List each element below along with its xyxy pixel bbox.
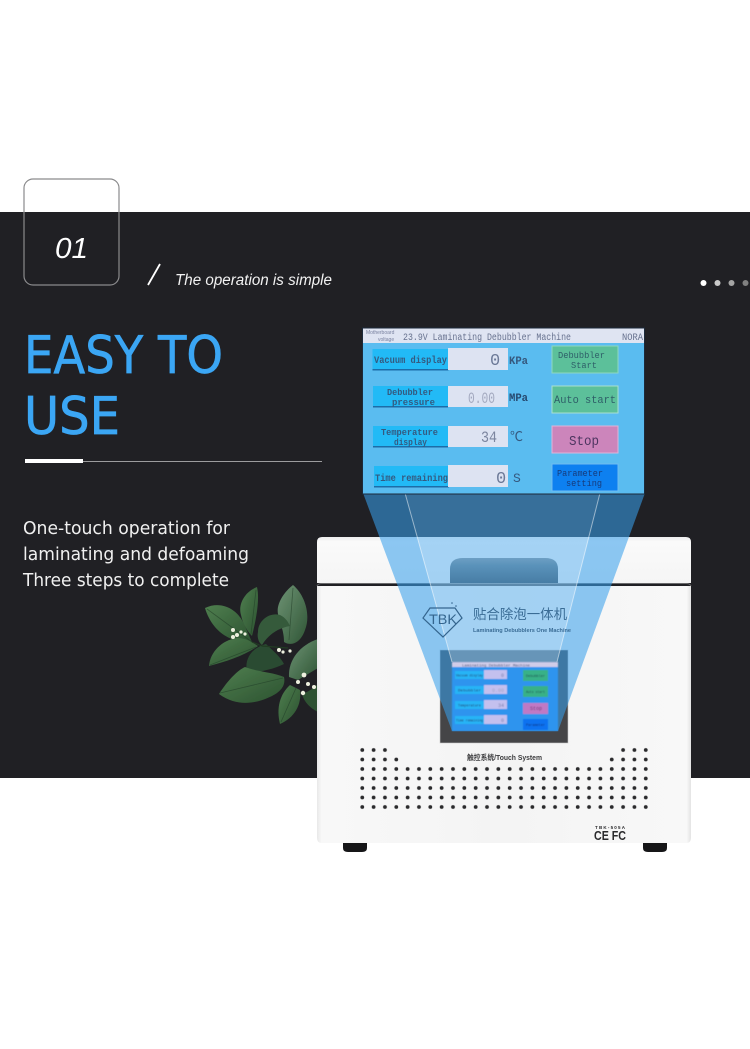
row: debubbler pressure: Debubbler [387,388,433,398]
row: vacuum display [372,348,528,371]
brand name: 贴合除泡一体机 [473,607,568,622]
small touch screen: 34 [498,703,504,709]
small touch screen: Debubbler [458,688,481,694]
button: parameter setting: setting [566,479,602,489]
title: EASY TO [24,326,223,386]
button: debubbler start: Debubbler [558,351,605,361]
small touch screen: 0 [501,673,504,679]
machine handle [450,558,558,583]
model and certification marks: CE FC [594,828,627,843]
machine [317,537,691,843]
screen header [363,328,644,344]
brand logo [423,602,462,637]
brand name [473,607,571,634]
screen header: voltage [378,337,394,343]
light beam [363,493,645,731]
row: time remaining: 0 [496,470,506,489]
brand logo: TBK [429,611,458,627]
small touch screen: Vacuum display [456,674,483,678]
row: vacuum display: Vacuum display [374,355,447,367]
small touch screen: 0 [501,718,504,724]
pagination dots [700,280,748,286]
small touch screen: Auto start [526,690,545,695]
subtitle: The operation is simple [175,272,332,289]
button: parameter setting: Parameter [557,469,603,479]
row: temperature display: display [394,438,428,448]
slash icon [148,264,160,285]
row: temperature display: Temperature [381,428,438,438]
number badge: 01 [55,233,88,265]
small touch screen: 0.00 [492,688,504,694]
small touch screen: Parameter [526,723,545,728]
machine feet [343,842,667,852]
button: stop: Stop [569,434,599,450]
row: temperature display: 34 [481,429,497,447]
brand name: Laminating Debubblers One Machine [473,628,571,634]
title underline [25,459,322,463]
model and certification marks: TBK-505A [595,825,626,830]
icon: tea leaves [205,585,318,724]
row: debubbler pressure: pressure [392,398,435,408]
row: vacuum display: KPa [509,356,528,368]
small touch screen: Debubbler [526,674,545,679]
air vents [357,745,651,812]
large touch screen zoom [362,328,644,494]
small touch screen: Time remaining [456,718,483,724]
small touch screen [452,662,558,731]
touch system label: 触控系统/Touch System [467,752,542,762]
title [24,326,223,447]
screen header: Motherboard [366,330,395,336]
small touch screen: Temperature [458,704,481,708]
dark banner [0,212,750,778]
row: debubbler pressure: 0.00 [468,390,495,408]
button: stop [552,426,618,453]
row: temperature display [373,426,523,448]
screen header: 23.9V Laminating Debubbler Machine [403,332,571,344]
row: time remaining: S [513,471,521,486]
description text [22,519,249,591]
description text: Three steps to complete [22,571,229,591]
description text: laminating and defoaming [23,545,249,565]
button: debubbler start: Start [571,361,597,371]
title: USE [24,387,120,447]
row: time remaining: Time remaining [375,473,448,485]
row: debubbler pressure: MPa [509,393,528,405]
description text: One-touch operation for [23,519,231,539]
number badge [24,179,119,285]
small touch screen: Stop [530,706,542,712]
row: time remaining [374,465,521,489]
button: auto start: Auto start [554,395,616,407]
row: temperature display: ℃ [510,429,523,444]
small touch screen: Laminating Debubbler Machine [462,664,530,668]
row: vacuum display: 0 [490,352,500,371]
row: debubbler pressure [373,386,528,408]
screen header: NORA [622,333,643,344]
button: debubbler start [552,346,618,373]
button: parameter setting [552,464,618,491]
button: auto start [552,386,618,413]
screen bezel [440,650,568,743]
